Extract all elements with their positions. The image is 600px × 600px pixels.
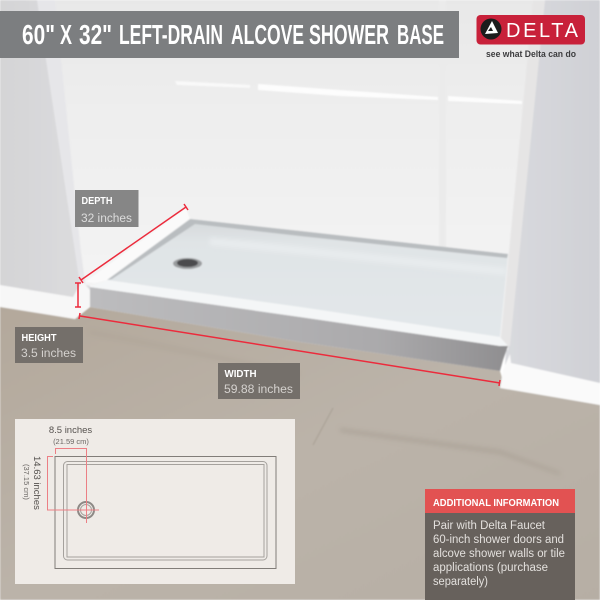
shower floor pan — [107, 219, 508, 337]
title: 32" — [79, 19, 112, 50]
panel body text: alcove shower walls or tile — [433, 548, 565, 560]
surround panel highlights — [175, 0, 522, 250]
dimension text: 14.63 inches — [22, 456, 42, 510]
title: BASE — [397, 19, 444, 50]
label: depth: DEPTH — [82, 196, 112, 207]
dimension text: 8.5 inches — [49, 425, 92, 446]
title: SHOWER — [309, 19, 389, 50]
floor — [0, 306, 600, 600]
title — [22, 19, 444, 50]
left baseboard — [0, 281, 90, 319]
label: depth — [75, 190, 138, 227]
right baseboard — [500, 354, 600, 405]
panel: plan diagram — [15, 419, 295, 584]
title: LEFT-DRAIN — [119, 19, 223, 50]
left wall — [0, 0, 90, 300]
panel body text: applications (purchase — [433, 562, 548, 574]
drain symbol — [78, 502, 94, 518]
title: 60" — [22, 19, 55, 50]
dimension text: 14.63 inches: (37.15 cm) — [22, 464, 31, 500]
label: width: WIDTH — [224, 369, 256, 380]
logo tagline: see what Delta can do — [486, 49, 576, 60]
inner basin outline — [64, 462, 267, 560]
right wall — [505, 0, 600, 385]
title: ALCOVE — [231, 19, 304, 50]
dimension: width line — [79, 313, 500, 386]
shower wall surround — [50, 0, 545, 350]
icon: delta mark — [480, 18, 502, 40]
base outline — [55, 456, 276, 568]
label: width — [218, 363, 300, 399]
panel body text: separately) — [433, 576, 488, 588]
dimension: depth line — [79, 204, 188, 283]
base front lip — [90, 280, 508, 346]
dimension text: 8.5 inches: 8.5 inches — [49, 425, 92, 436]
panel body text — [433, 520, 565, 588]
Delta logo — [476, 15, 585, 60]
drain — [173, 258, 202, 269]
left wall frame strip — [37, 0, 84, 285]
dimension: height line — [75, 283, 81, 307]
side ledge — [85, 208, 190, 283]
dimension text: 14.63 inches: 14.63 inches — [31, 456, 42, 510]
dimension text: 8.5 inches: (21.59 cm) — [53, 437, 89, 446]
label: height: 3.5 inches — [21, 348, 76, 360]
base front face — [90, 287, 508, 371]
label: depth: 32 inches — [81, 213, 132, 225]
panel body text: Pair with Delta Faucet — [433, 520, 546, 532]
panel heading: ADDITIONAL INFORMATION — [433, 497, 559, 509]
label: height — [15, 327, 83, 363]
panel: additional information — [425, 489, 575, 600]
label: height: HEIGHT — [22, 333, 56, 344]
Delta logo: DELTA — [506, 20, 579, 42]
drain offset dimension lines — [48, 448, 99, 523]
title bar — [0, 11, 459, 58]
panel body text: 60-inch shower doors and — [433, 534, 564, 546]
title: X — [60, 19, 72, 50]
right wall frame strip — [500, 0, 545, 346]
label: width: 59.88 inches — [224, 384, 293, 396]
